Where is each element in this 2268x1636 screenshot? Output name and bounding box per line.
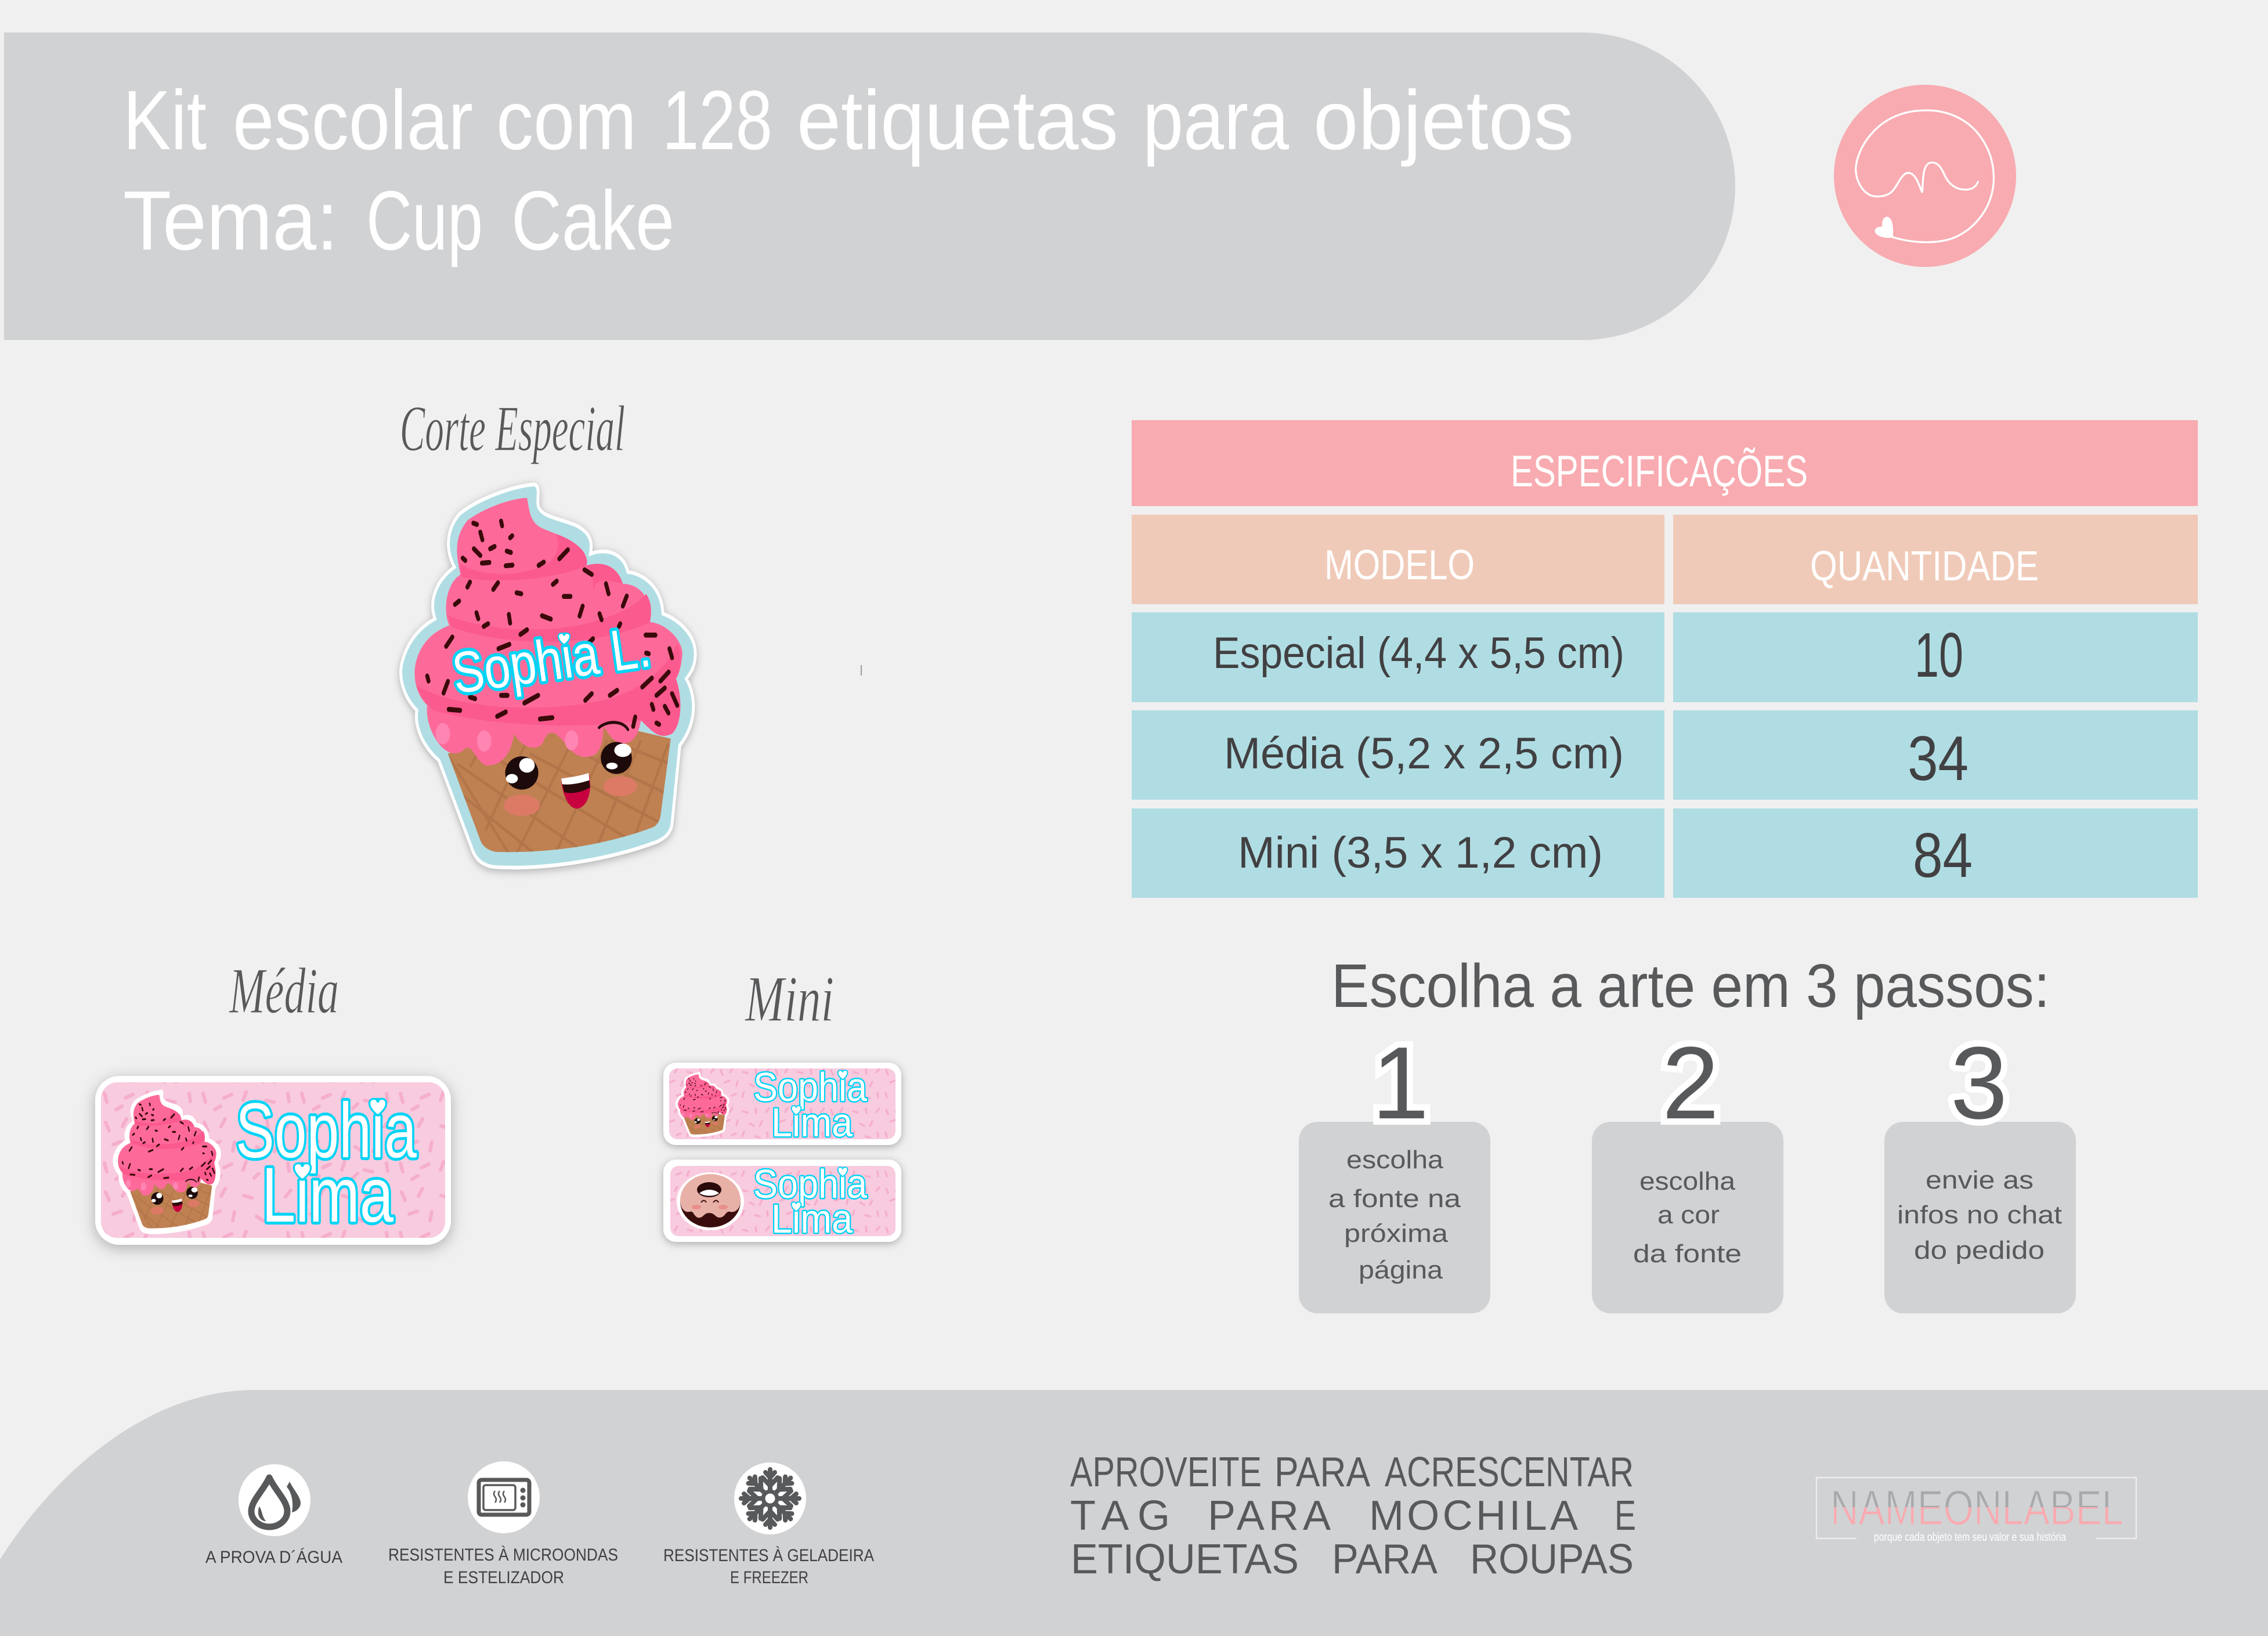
mini label name: Lima — [771, 1196, 853, 1241]
step 3 text: do pedido — [1914, 1236, 2045, 1265]
header banner — [4, 32, 1735, 340]
feature: microwave — [388, 1461, 618, 1587]
step 2 text: a cor — [1657, 1201, 1720, 1229]
mini cupcake — [676, 1072, 729, 1137]
step 1 number: 1 — [1372, 1025, 1429, 1140]
label — [388, 1545, 618, 1587]
mini label name — [753, 1161, 867, 1241]
label: E FREEZER — [730, 1568, 808, 1587]
upsell text: ETIQUETAS — [1071, 1536, 1299, 1583]
mini label 2 — [663, 1160, 901, 1242]
mini label hearts — [792, 1167, 847, 1212]
icon: water drops — [251, 1478, 301, 1527]
column header: modelo: MODELO — [1324, 542, 1475, 588]
title: Cake — [511, 174, 674, 268]
title: Tema: — [123, 174, 338, 268]
title: etiquetas — [797, 73, 1118, 167]
row: media — [1132, 710, 2198, 800]
row: mini: Mini (3,5 x 1,2 cm) — [1238, 828, 1603, 877]
sticker name: Sophia L. — [448, 614, 655, 706]
donut — [677, 1172, 744, 1230]
row: especial: Especial (4,4 x 5,5 cm) — [1213, 629, 1624, 678]
upsell text: PARA — [1332, 1536, 1438, 1583]
upsell text: MOCHILA — [1369, 1493, 1578, 1539]
tagline: porque cada objeto tem seu valor e sua história — [1874, 1531, 2067, 1544]
step 3 text: infos no chat — [1897, 1201, 2062, 1229]
title: com — [496, 73, 637, 167]
mini label 1 — [663, 1063, 901, 1145]
mini label name: Sophia — [753, 1161, 867, 1207]
table title row — [1132, 420, 2198, 506]
title: objetos — [1313, 73, 1574, 167]
upsell text: PARA — [1208, 1493, 1331, 1539]
feature: water proof — [205, 1464, 342, 1567]
step 2 — [1592, 1025, 1783, 1313]
row: especial: 10 — [1915, 620, 1963, 691]
medium label name: Sophia — [236, 1088, 417, 1174]
step 1 text: página — [1359, 1256, 1443, 1284]
step 1 text — [1328, 1146, 1461, 1284]
stray mark — [861, 665, 862, 676]
medium label cupcake — [113, 1090, 221, 1234]
table title row: ESPECIFICAÇÕES — [1511, 447, 1808, 496]
heading: Mini: Mini — [745, 963, 834, 1035]
mini label hearts — [792, 1070, 847, 1115]
medium label — [95, 1076, 451, 1245]
title: 128 — [662, 73, 772, 167]
icon: microwave — [479, 1480, 529, 1515]
step 2 text: escolha — [1639, 1167, 1736, 1196]
brand logo circle — [1834, 85, 2016, 267]
title: para — [1143, 73, 1289, 167]
column header: modelo — [1132, 515, 1664, 604]
nameonlabel logo — [1816, 1478, 2136, 1544]
medium label name: Lima — [262, 1152, 393, 1238]
step 1 text: escolha — [1346, 1146, 1444, 1174]
title: escolar — [233, 73, 473, 167]
step 3 number: 3 — [1951, 1025, 2007, 1140]
sticker heart — [558, 633, 570, 645]
upsell text: ROUPAS — [1470, 1536, 1634, 1583]
step 1 text: a fonte na — [1328, 1184, 1461, 1213]
step 3 — [1884, 1025, 2076, 1313]
label: RESISTENTES À MICROONDAS — [388, 1545, 618, 1565]
label: E ESTELIZADOR — [443, 1568, 564, 1587]
column header: quantidade — [1673, 515, 2198, 604]
title: Cup — [366, 174, 483, 268]
step 2 number: 2 — [1662, 1025, 1719, 1140]
mini label name: Lima — [771, 1100, 853, 1145]
row: mini — [1132, 808, 2198, 898]
step 1 text: próxima — [1344, 1219, 1449, 1248]
title: Kit — [123, 73, 207, 167]
heading: Corte Especial: Corte Especial — [400, 393, 625, 465]
label — [663, 1546, 874, 1587]
medium label name — [236, 1088, 417, 1238]
step 1 — [1299, 1025, 1490, 1313]
upsell text: APROVEITE — [1070, 1449, 1262, 1496]
upsell text: E — [1615, 1493, 1636, 1539]
heading: steps: Escolha a arte em 3 passos: — [1331, 952, 2050, 1020]
mini label name — [753, 1064, 867, 1145]
title — [123, 73, 1574, 268]
row: media: Média (5,2 x 2,5 cm) — [1224, 729, 1624, 778]
special cut cupcake sticker — [401, 485, 695, 868]
row: mini: 84 — [1913, 820, 1973, 891]
step 3 text: envie as — [1926, 1166, 2034, 1194]
upsell text: PARA — [1274, 1449, 1370, 1496]
icon: snowflake — [741, 1469, 799, 1527]
step 2 text: da fonte — [1633, 1240, 1742, 1268]
footer band — [0, 1390, 2268, 1636]
label: A PROVA D´ÁGUA — [205, 1548, 342, 1567]
medium label hearts — [294, 1099, 387, 1180]
nameonlabel logo: NAMEONLABEL — [1830, 1480, 2123, 1535]
upsell text: ACRESCENTAR — [1385, 1449, 1634, 1496]
upsell text: TAG — [1070, 1493, 1170, 1539]
feature: freezer — [663, 1462, 874, 1587]
step 3 text — [1897, 1166, 2062, 1265]
heading: Média: Média — [229, 955, 339, 1027]
column header: quantidade: QUANTIDADE — [1810, 543, 2039, 590]
upsell text — [1070, 1449, 1636, 1583]
row: media: 34 — [1908, 723, 1969, 794]
specifications table — [1132, 420, 2198, 898]
row: especial — [1132, 612, 2198, 702]
label: RESISTENTES À GELADEIRA — [663, 1546, 874, 1565]
step 2 text — [1633, 1167, 1742, 1268]
mini label name: Sophia — [753, 1064, 867, 1110]
